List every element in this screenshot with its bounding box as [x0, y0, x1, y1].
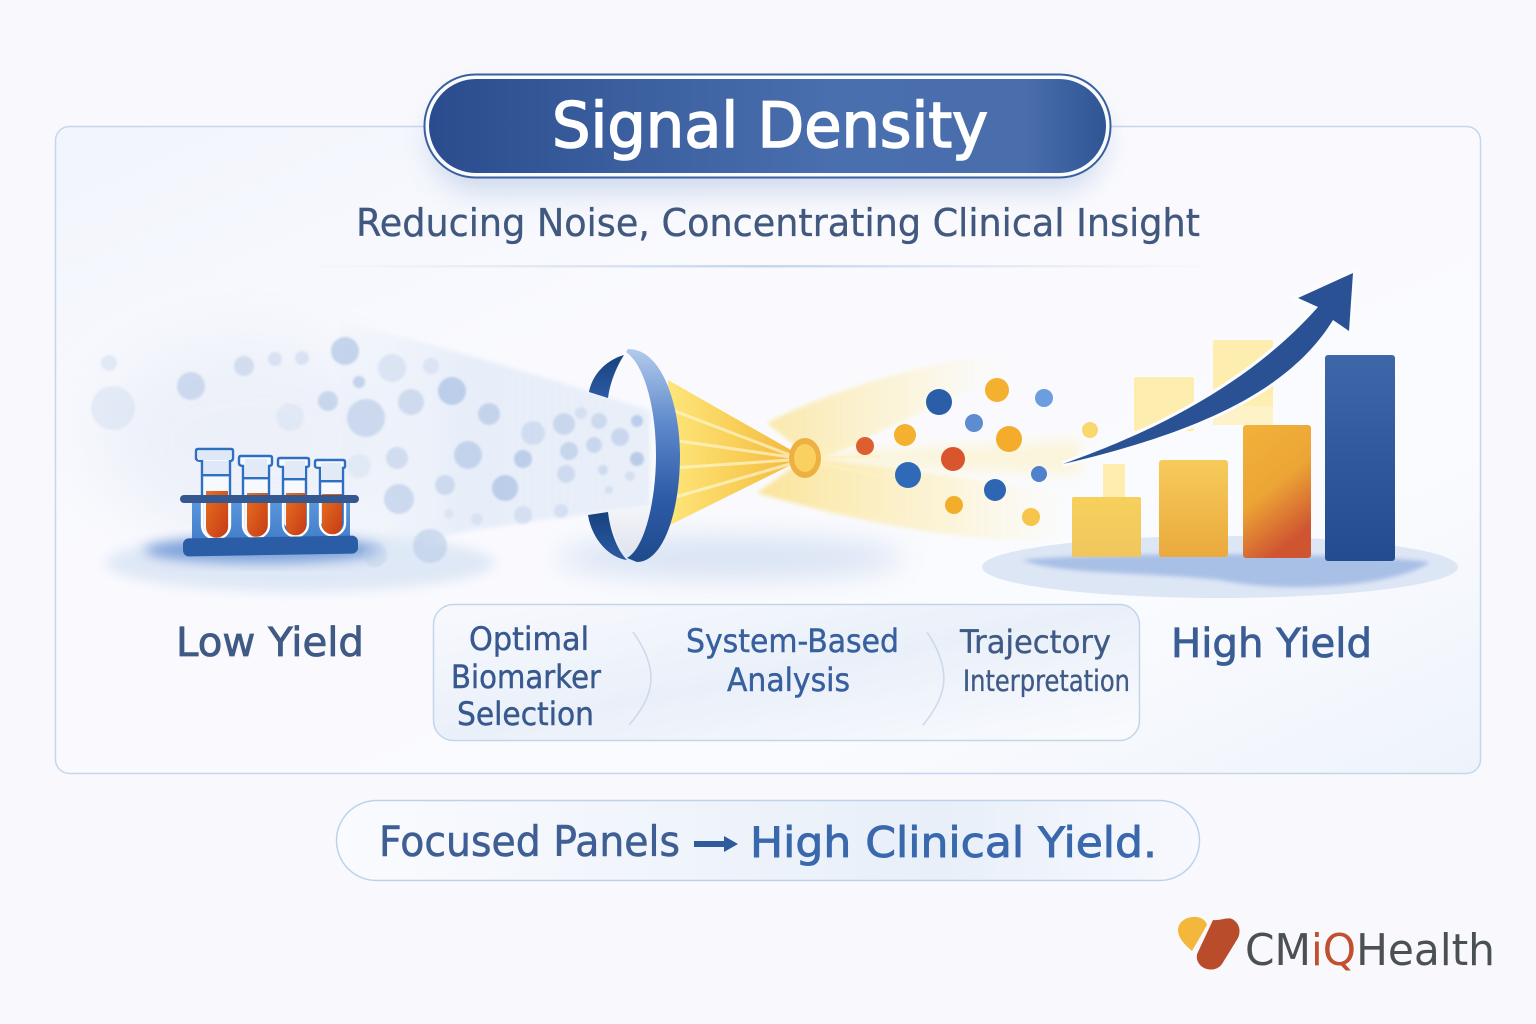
noise particles	[91, 337, 644, 567]
test tube 1	[196, 449, 233, 539]
noise wedge converging into lens	[340, 322, 650, 570]
step 1: optimal biomarker selection: Optimal	[469, 620, 589, 658]
label: low yield: Low Yield	[176, 620, 364, 666]
panel: main card	[56, 126, 1480, 774]
callout: focused panels	[336, 800, 1200, 880]
bar 1	[1072, 497, 1141, 557]
rack base	[183, 535, 358, 557]
bar 4	[1325, 355, 1395, 561]
step 3: trajectory interpretation	[959, 623, 1130, 698]
label: high yield: High Yield	[1171, 621, 1372, 667]
floor shadow: test tubes	[105, 534, 495, 592]
step 3: trajectory interpretation: Interpretation	[963, 664, 1130, 698]
bar 2	[1159, 460, 1228, 557]
chevron 2	[923, 632, 944, 725]
step 2: system-based analysis: Analysis	[727, 661, 850, 699]
ring interior lower shading	[608, 505, 654, 556]
step 3: trajectory interpretation: Trajectory	[959, 623, 1111, 661]
rack body	[192, 500, 350, 548]
step 2: system-based analysis: System-Based	[686, 622, 899, 660]
test tube 4	[315, 460, 345, 536]
noise cloud	[91, 322, 650, 592]
callout text right: High Clinical Yield.	[750, 818, 1157, 867]
title: Signal Density	[552, 89, 988, 162]
step 1: optimal biomarker selection	[451, 620, 602, 733]
floor shadow: bars	[982, 536, 1458, 598]
rack top bar	[180, 495, 359, 503]
step 1: optimal biomarker selection: Biomarker	[451, 658, 602, 696]
concentrated signal dots	[856, 378, 1098, 526]
step 2: system-based analysis	[686, 622, 899, 699]
callout text left: Focused Panels	[379, 817, 680, 866]
lens ring front	[626, 349, 680, 562]
bar chart	[1072, 340, 1395, 561]
logo mark: red lobe	[1197, 918, 1240, 970]
panel: process steps	[434, 604, 1140, 740]
growth arrow	[1063, 273, 1353, 464]
chevron 1	[629, 632, 651, 725]
title banner	[424, 74, 1110, 192]
yellow focusing cone	[668, 380, 880, 526]
floor shadow: lens	[555, 536, 905, 580]
faded back bars	[1103, 340, 1273, 497]
icon: test tube rack	[180, 449, 359, 557]
logo wordmark: CMiQHealth	[1245, 925, 1495, 976]
logo mark: yellow lobe	[1178, 917, 1207, 951]
subtitle: Reducing Noise, Concentrating Clinical Insight	[356, 201, 1200, 245]
bar 3	[1243, 425, 1311, 558]
step 1: optimal biomarker selection: Selection	[457, 695, 594, 733]
ring upper left band	[589, 355, 624, 398]
logo	[1178, 917, 1495, 976]
test tube 2	[239, 456, 272, 538]
lens ring back	[588, 355, 654, 560]
ring lower left band	[588, 512, 627, 560]
focal point	[789, 438, 821, 478]
test tube 3	[278, 458, 309, 536]
icon: arrow	[694, 836, 738, 852]
yellow light beams after focus	[757, 355, 1080, 541]
